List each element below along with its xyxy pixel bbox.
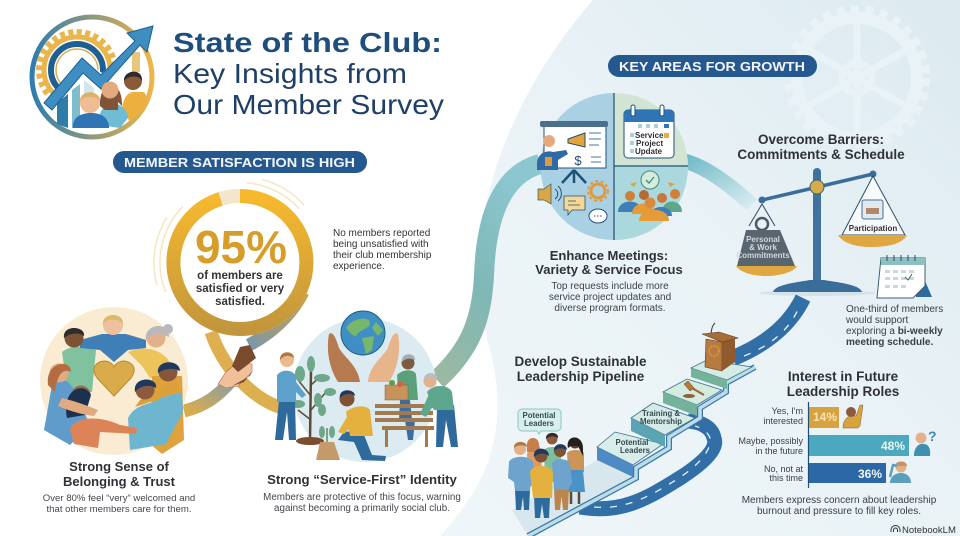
text: bi-weekly: meeting schedule. (846, 337, 933, 348)
ribbon: meetings to barriers (680, 160, 752, 205)
text: service-first (263, 472, 461, 514)
text: leadership concern (742, 495, 937, 517)
heading: Variety & Service Focus (535, 262, 683, 277)
values: 36% (858, 467, 882, 481)
description: Members are protective of this focus, warning (263, 492, 461, 503)
icon: logo gear (39, 32, 115, 108)
category labels: this time (769, 473, 803, 483)
man green (544, 433, 561, 482)
title: Our Member Survey (173, 89, 444, 120)
pan: participation (838, 176, 907, 247)
man left (508, 442, 535, 510)
icon: podium (702, 323, 738, 371)
title: State of the Club: (173, 27, 442, 58)
ground path (512, 460, 633, 536)
step: training and mentorship (631, 403, 695, 447)
bench and volunteers (375, 354, 458, 447)
icon: background gear (788, 9, 926, 147)
woman dark (566, 438, 585, 504)
presentation board: $ (574, 153, 582, 168)
values (813, 410, 905, 481)
icon: logo bars (57, 52, 140, 128)
tree (291, 356, 336, 445)
ring caption: satisfied or very (196, 283, 285, 295)
heading: Strong Sense of (69, 459, 170, 474)
text: leadership concern: Members express concern about leadership (742, 495, 937, 506)
globe in hands (328, 311, 399, 382)
meeting audience (618, 171, 682, 221)
logo (32, 17, 153, 137)
meeting icons (538, 181, 608, 223)
description: Top requests include more (551, 281, 669, 292)
category labels: Maybe, possibly (738, 436, 803, 446)
text: belonging (43, 459, 195, 515)
calendar update (624, 105, 674, 158)
volunteer kneeling (316, 390, 386, 461)
icon: thinking person (914, 428, 937, 456)
stairs (528, 323, 755, 536)
category labels: No, not at (764, 464, 803, 474)
text: bi-weekly (845, 304, 943, 348)
heading: interest in leadership (787, 369, 899, 399)
icon: thinking person: ? (928, 428, 937, 444)
icon: logo arrow (44, 26, 153, 110)
big number: 95% (195, 221, 287, 273)
heading: leadership pipeline: Develop Sustainable (514, 354, 647, 369)
calendar update: Service (635, 131, 664, 140)
weight: personal and work commitments: & Work (749, 243, 777, 252)
icon: belonging circle (40, 307, 188, 455)
heading: overcome barriers: Overcome Barriers: (758, 132, 884, 147)
callout: potential leaders: Potential (523, 411, 555, 420)
icon: service circle (275, 311, 458, 462)
stair rim (528, 367, 755, 536)
heading: Enhance Meetings: (550, 248, 668, 263)
man yellow (530, 449, 553, 518)
volunteer left (275, 352, 306, 440)
step: training and mentorship: Training & (642, 409, 680, 418)
category labels (738, 406, 803, 483)
step: potential leaders (597, 432, 663, 477)
category labels: in the future (755, 446, 803, 456)
presentation board (537, 121, 608, 183)
watermark: NotebookLM (902, 525, 956, 536)
heading: key areas (608, 55, 817, 77)
ring caption: of members are (197, 270, 283, 282)
text: no unsatisfied members: experience. (333, 261, 385, 272)
heart (94, 361, 134, 396)
step: top (691, 360, 752, 389)
heading: member satisfaction (113, 151, 367, 173)
road: upper (733, 298, 803, 358)
icon: wall calendar (877, 255, 932, 298)
ring caption: satisfied. (215, 296, 265, 308)
description (263, 492, 461, 514)
step: gavel (663, 379, 722, 416)
heading (535, 248, 683, 277)
callout: potential leaders (518, 409, 561, 434)
man blue (552, 444, 572, 510)
bar chart: leadership interest (738, 402, 937, 488)
icon: person looking (890, 462, 911, 483)
category labels: interested (763, 416, 803, 426)
icon: meetings circle (537, 93, 688, 240)
callout: potential leaders: Leaders (524, 419, 555, 428)
text: no unsatisfied members: being unsatisfied with (333, 239, 429, 250)
heading: interest in leadership: Interest in Future (788, 369, 899, 384)
ring caption (196, 270, 285, 308)
ribbon: service to growth (437, 164, 540, 380)
description: service project updates and (549, 292, 671, 303)
title (173, 27, 444, 120)
description (43, 493, 195, 515)
description: that other members care for them. (46, 504, 192, 515)
background: growth panel (440, 0, 960, 536)
description: diverse program formats. (554, 303, 666, 314)
calendar update: Project (636, 139, 663, 148)
title: Key Insights from (173, 58, 407, 89)
calendar update: Update (635, 147, 663, 156)
description: Over 80% feel “very” welcomed and (43, 493, 195, 504)
heading: overcome barriers: Commitments & Schedule (737, 147, 905, 162)
bars (808, 402, 909, 488)
step: training and mentorship: Mentorship (640, 417, 682, 426)
step: potential leaders: Potential (616, 438, 648, 447)
heading: member satisfaction: MEMBER SATISFACTION IS HIGH (124, 155, 355, 170)
icon: handshake (218, 345, 256, 388)
pan: participation: Participation (849, 224, 897, 233)
icon: raising hand (843, 405, 863, 428)
icon: group of potential leaders (508, 433, 585, 518)
text: no unsatisfied members: their club membership (333, 250, 432, 261)
icon: logo people (73, 72, 146, 128)
text: no unsatisfied members: No members reported (333, 228, 430, 239)
heading: Belonging & Trust (63, 474, 176, 489)
swoosh: satisfaction ribbons (184, 292, 303, 411)
values: 48% (881, 439, 905, 453)
chart: 95% ring (135, 157, 345, 368)
description: against becoming a primarily social club. (274, 503, 450, 514)
weight: personal and work commitments (736, 204, 797, 276)
woman behind (527, 438, 543, 486)
heading: interest in leadership: Leadership Roles (787, 384, 899, 399)
text: no unsatisfied members (333, 228, 432, 272)
text: bi-weekly: exploring a bi-weekly (846, 326, 943, 337)
heading (63, 459, 176, 489)
heading: leadership pipeline (514, 354, 647, 384)
weight: personal and work commitments: Personal (746, 235, 780, 244)
category labels: Yes, I'm (772, 406, 803, 416)
text: bi-weekly: One-third of members (846, 304, 943, 315)
weight: personal and work commitments: Commitments (736, 251, 790, 260)
description (549, 281, 671, 314)
values: 14% (813, 410, 837, 424)
icon: balance scale (736, 168, 907, 296)
heading: overcome barriers (737, 132, 905, 162)
text: enhance meetings (535, 248, 683, 314)
road: lower (580, 421, 715, 509)
people hugging (44, 315, 184, 454)
text: leadership concern: burnout and pressure to fill key roles. (757, 506, 921, 517)
heading: key areas: KEY AREAS FOR GROWTH (619, 59, 805, 74)
heading: Strong “Service-First” Identity (267, 472, 458, 487)
heading: leadership pipeline: Leadership Pipeline (517, 369, 645, 384)
step: potential leaders: Leaders (620, 446, 651, 455)
text: bi-weekly: would support (845, 315, 908, 326)
